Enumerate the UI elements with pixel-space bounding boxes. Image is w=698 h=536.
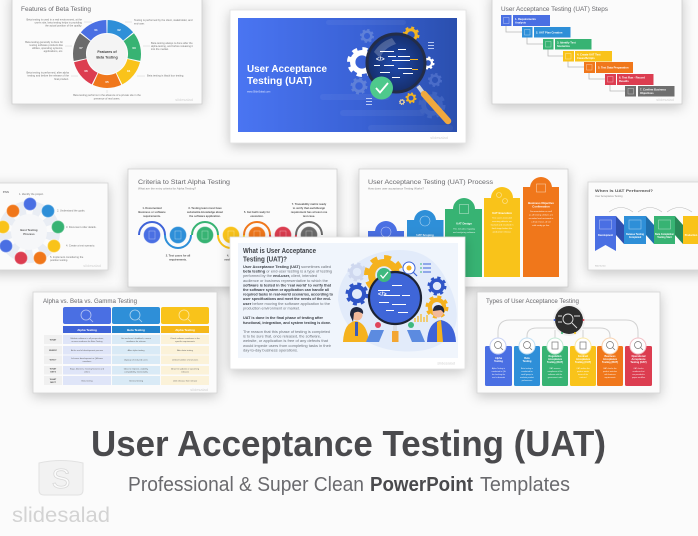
donut chart: 04	[127, 69, 130, 73]
comparison table rows: Validate software in all perspectives,	[70, 337, 104, 340]
slide: what is uat: slidesalad	[437, 360, 455, 366]
type cards: software with the	[548, 373, 562, 376]
comparison table rows: GETS	[50, 372, 57, 374]
donut chart: Features of	[97, 50, 117, 54]
step bars: 1. Requirements	[515, 17, 536, 21]
step bars: Scenarios	[557, 44, 570, 48]
process labels: 3. Document order details.	[66, 225, 97, 229]
step bars: 2. UAT Plan Creation	[536, 30, 563, 34]
type cards: Beta	[524, 357, 530, 360]
type cards: OAT checks	[633, 367, 644, 370]
comparison table header: Alpha Testing	[175, 328, 195, 332]
type cards: Alpha	[495, 357, 503, 360]
criteria labels: evaluation	[224, 258, 238, 262]
feature descriptions: Beta testing is black box testing.	[147, 74, 184, 78]
type cards: Acceptance	[576, 358, 591, 361]
type cards: Contract	[578, 355, 588, 358]
illustration: uat team with magnifier	[338, 250, 457, 352]
process labels	[19, 192, 97, 262]
donut chart	[68, 15, 146, 93]
slide: when is uat performed: Slide Number	[595, 266, 606, 268]
type cards: conducted in QA	[492, 370, 506, 373]
process hub: Best Testing	[20, 228, 38, 232]
type cards: requirements	[604, 376, 616, 379]
type cards: BAT checks the	[603, 367, 617, 370]
body text: the software system or application can handle all	[243, 288, 329, 292]
type cards: proper workflow	[632, 376, 646, 379]
donut chart: 05	[105, 80, 109, 84]
donut chart: Beta Testing	[96, 56, 118, 60]
type cards: Alpha Testing is	[492, 367, 505, 370]
type cards: Testing (OAT)	[630, 361, 647, 364]
main title: User Acceptance Testing (UAT)	[91, 423, 606, 464]
subtitle: Templates	[480, 474, 570, 496]
type cards: with business	[604, 373, 616, 376]
body text: UAT is done in the final phase of testing after	[243, 316, 324, 320]
criteria labels: test case.	[303, 214, 315, 218]
body text: software is tested in the 'real world' to verify that	[243, 283, 332, 287]
type cards: Business	[604, 355, 616, 358]
slide: features of beta testing: slidesalad	[175, 97, 193, 102]
column text: UAT Scoping	[416, 233, 434, 237]
comparison table rows: WHO?	[50, 360, 57, 362]
type cards: Testing	[523, 360, 532, 363]
comparison table rows: WHAT	[50, 368, 57, 370]
comparison table rows: compatibility, functionality	[124, 370, 149, 374]
column text: Business Objective	[528, 201, 554, 205]
comparison table rows: A group of end-end users	[124, 358, 148, 362]
slide: uat steps	[492, 0, 682, 104]
type cards: Testing (RAT)	[547, 361, 563, 364]
comparison table rows: After alpha testing	[128, 349, 145, 352]
column text: and analyzing software	[453, 231, 476, 234]
body text: day-to-day business operations.	[243, 348, 298, 352]
logo: slidesalad: S	[52, 463, 70, 494]
column text: This includes mapping	[453, 228, 476, 230]
slide heading: criteria: Criteria to Start Alpha Testing	[138, 179, 230, 186]
feature descriptions: final product.	[54, 77, 69, 81]
subtitle	[128, 474, 570, 496]
comparison table rows: Get end-user's feedback, ensure	[121, 337, 152, 340]
slide: criteria to start alpha testing: What are the entry criteria for Alpha Testing?	[138, 188, 197, 190]
ribbons: Release Testing	[626, 233, 645, 236]
comparison table header: Beta Testing	[127, 328, 145, 332]
slide heading: steps: User Acceptance Testing (UAT) Steps	[501, 6, 608, 13]
slide: alpha vs beta vs gamma	[33, 292, 217, 393]
column text	[416, 201, 554, 237]
process labels: 1. Identify the project.	[19, 192, 44, 196]
gears	[349, 28, 444, 117]
criteria labels: 5. Get built ready for	[244, 210, 270, 214]
comparison table rows: Ideas for updates or upcoming	[171, 368, 200, 370]
process labels: 2. Understand the goals.	[57, 208, 86, 212]
feature descriptions: presence of real users.	[94, 96, 120, 100]
criteria labels: requirement has at least one	[291, 210, 328, 214]
type cards: contract	[580, 376, 587, 379]
decorative bars	[320, 20, 453, 131]
slide: criteria to start alpha testing	[128, 169, 337, 287]
comparison table rows: WHAT	[50, 378, 57, 381]
hub icon	[553, 304, 585, 336]
feature descriptions: Beta testing generally is done for	[25, 40, 63, 44]
slide heading: comparison: Alpha vs. Beta vs. Gamma Testing	[43, 299, 137, 305]
body text: production environment or market.	[243, 306, 300, 310]
connector lines	[498, 320, 638, 340]
donut chart: 07	[79, 46, 83, 50]
type cards: Regulation	[549, 355, 562, 358]
type cards: readiness that	[633, 370, 645, 373]
type cards: Acceptance	[631, 358, 646, 361]
comparison table rows: After beta testing	[177, 349, 194, 352]
feature descriptions: Beta testing always is done after the	[151, 41, 193, 45]
body text: performed by the end-user, client, intended	[243, 274, 317, 278]
criteria labels: the software application.	[189, 214, 221, 218]
type cards: conducted for	[521, 370, 533, 373]
comparison table rows: General testing	[129, 380, 144, 382]
column text: UAT Design	[456, 222, 472, 226]
slide heading fragment: ess	[3, 189, 9, 194]
column text: UAT Execution	[492, 211, 512, 215]
subtitle: Professional & Super Clean	[128, 474, 364, 496]
feature descriptions: alpha-testing, and before releasing it	[151, 44, 193, 48]
step bars: Objectives	[640, 91, 654, 95]
donut chart: 01	[94, 28, 98, 32]
comparison table rows: ensure readiness for Beta Testing	[72, 340, 103, 343]
column text: Confirmation	[532, 204, 550, 208]
type cards: product matches	[603, 370, 617, 373]
criteria labels: substantia knowledge about	[187, 210, 223, 214]
body text: website, or application is free of any defects that	[243, 339, 328, 343]
comparison table header	[63, 307, 209, 333]
step connectors	[506, 26, 625, 91]
body text	[243, 265, 334, 352]
step bars: 4. Create UAT Test	[577, 52, 601, 56]
comparison table rows: Limit release, then release	[173, 380, 198, 382]
wave timeline	[139, 222, 322, 248]
type cards: terms of the	[578, 373, 588, 376]
donut chart: 06	[84, 69, 88, 73]
slide: what is uat	[230, 237, 465, 369]
subtitle: PowerPoint	[370, 474, 473, 496]
criteria labels: 1. Documented	[142, 206, 162, 210]
stair columns	[368, 177, 559, 277]
feature descriptions: testing and before the release of the	[27, 74, 70, 78]
step bars: 5. Test Data Preparation	[598, 66, 629, 70]
body text: The reason that this phase of testing is completed	[243, 330, 330, 334]
title text: Testing (UAT)	[247, 76, 312, 87]
slide: title slide	[230, 10, 466, 143]
step bars: Results	[619, 79, 629, 83]
type cards: Testing (CAT)	[575, 361, 591, 364]
illustration: uat team with magnifier: </>	[378, 292, 387, 298]
ribbons	[595, 216, 698, 251]
type cards: Acceptance	[548, 358, 563, 361]
feature descriptions: user's site, beta testing helps in providing	[35, 20, 83, 24]
body text: required tasks in real-world scenarios, according to	[243, 293, 334, 297]
criteria labels: 3. Testing team must have	[188, 206, 222, 210]
process labels: position testing.	[50, 258, 68, 262]
slide: types of uat	[477, 292, 660, 393]
body text: User Acceptance Testing (UAT) sometimes called	[243, 265, 331, 269]
ribbons: Completed	[629, 236, 642, 239]
column text: recorded and reviewed in	[529, 217, 554, 220]
comparison table rows: members	[83, 360, 91, 363]
comparison table rows: Limited number of end users	[172, 358, 198, 362]
ribbons: Development	[598, 234, 613, 237]
comparison table rows: releases	[181, 370, 189, 374]
slide: when is uat performed	[588, 182, 698, 270]
feature descriptions: testing software products like	[30, 43, 64, 47]
step bars	[501, 15, 674, 96]
slide: features of beta testing	[12, 0, 202, 104]
criteria labels: to verify that each/design	[293, 206, 326, 210]
process nodes	[0, 198, 64, 264]
column text: Test cases executed	[492, 216, 513, 220]
type cards: evaluate product	[520, 376, 534, 379]
slide heading: what is uat: What is User Acceptance	[243, 246, 316, 255]
slide heading: what is uat: Testing (UAT)?	[243, 254, 287, 264]
feature descriptions: applications, etc.	[44, 49, 63, 53]
comparison table rows: specific requirements	[175, 340, 195, 343]
step bars: 6. Test Run - Record	[619, 76, 645, 80]
arcs	[609, 208, 692, 212]
step bars: Cases/Scripts	[577, 56, 595, 60]
comparison table rows	[44, 335, 209, 385]
process labels: 4. Create a test scenario.	[66, 244, 95, 248]
body text: is to be sure that, once released, the software,	[243, 335, 321, 339]
slide heading: when: When Is UAT Performed?	[595, 189, 654, 193]
feature descriptions: Testing is performed by the client, stakeholder, and	[134, 18, 193, 22]
feature descriptions: into the market.	[151, 47, 169, 51]
type cards: Operational	[632, 355, 646, 358]
pale content panel	[238, 243, 458, 358]
slide: when is uat performed: User Acceptance Testing	[595, 195, 623, 198]
slide: title slide: slidesalad	[430, 135, 448, 140]
column text: a final review, all set	[531, 220, 551, 224]
comparison table rows: In-house development or QA team	[71, 357, 103, 360]
process hub	[5, 208, 53, 256]
magnifying glass: </>	[376, 57, 385, 63]
ribbons: Production	[685, 234, 698, 237]
feature descriptions: end-user.	[134, 22, 145, 26]
step bars: 3. Identify Test	[557, 40, 576, 44]
criteria labels	[138, 202, 328, 262]
donut chart: 03	[132, 46, 136, 50]
type cards: Acceptance	[603, 358, 618, 361]
comparison table rows: Check software readiness in the	[170, 337, 201, 340]
step bars: 7. Confirm Business	[640, 88, 666, 92]
wave circles	[144, 226, 318, 244]
comparison table rows: Bugs, blockers, missing features and	[70, 368, 105, 370]
column text: as all testing artifacts are	[529, 214, 554, 216]
type cards: Testing	[494, 360, 503, 363]
slide: best testing process	[0, 183, 108, 270]
title text	[247, 64, 327, 94]
comparison table rows: At the end of development process	[71, 349, 103, 352]
comparison table rows: others	[84, 370, 90, 374]
criteria labels: requirements.	[169, 258, 187, 262]
criteria labels: requirements.	[143, 214, 161, 218]
blue title panel	[238, 18, 457, 132]
type cards: are provided in	[632, 373, 645, 376]
body text: beta testing or end-user testing is a type of testing	[243, 270, 332, 274]
ribbons: Testing Start	[657, 236, 672, 239]
donut chart: 02	[117, 28, 121, 32]
type cards: product meets	[577, 370, 589, 373]
type cards: compliance of the	[548, 370, 562, 373]
criteria labels: 2. Test cases for all	[166, 254, 191, 258]
criteria labels: 7. Traceability matrix ready	[292, 202, 327, 206]
type cards	[485, 338, 652, 386]
body text: user before moving the software application to the	[243, 302, 330, 306]
feature descriptions	[25, 18, 193, 100]
column text: final stage before the	[492, 227, 513, 230]
comparison table rows: readiness for release	[126, 340, 147, 343]
slide heading: types: Types of User Acceptance Testing	[486, 299, 579, 305]
criteria labels: 4. Test	[227, 254, 235, 258]
logo: slidesalad	[12, 460, 110, 527]
column text: production release.	[493, 230, 512, 234]
feature descriptions: the actual position of the quality.	[45, 24, 82, 28]
type cards: performance	[522, 379, 532, 382]
slide heading: features of beta testing: Features of Beta Testing	[21, 6, 92, 13]
comparison table header: Alpha Testing	[77, 328, 97, 332]
feature descriptions: utilities, operating systems,	[32, 46, 63, 50]
process hub: Process	[23, 232, 35, 236]
logo: slidesalad: slidesalad	[12, 504, 110, 527]
slide heading: what is uat	[243, 246, 316, 264]
title text: User Acceptance	[247, 64, 327, 75]
comparison table rows: Ideas to improve, usability,	[124, 368, 149, 370]
type cards: RAT ensures	[550, 367, 560, 370]
feature descriptions: Beta testing is used in a real environment, at the	[26, 18, 83, 22]
column text: tracked and resolved in	[491, 224, 514, 226]
slide: best testing process: slidesalad	[83, 263, 101, 268]
body text: would impede users from completing tasks in their	[243, 344, 332, 348]
step bars: Analysis	[515, 20, 527, 24]
comparison table rows: WHEN?	[49, 350, 58, 352]
criteria labels: Business or software	[138, 210, 166, 214]
criteria labels: execution.	[250, 214, 264, 218]
feature descriptions: Beta testing is performed, after alpha	[26, 70, 70, 74]
ribbons: Beta Completion	[655, 233, 675, 236]
process labels: 5. Implement considering the	[50, 255, 84, 259]
column text: Documentation as well	[530, 210, 553, 213]
type cards: Testing (BAT)	[602, 361, 618, 364]
body text: functional, integration, and system testing is done.	[243, 321, 331, 325]
slide heading: process: User Acceptance Testing (UAT) Process	[368, 179, 494, 186]
icon: green check badge	[370, 76, 393, 100]
checklists	[366, 42, 434, 105]
slide: uat steps: slidesalad	[656, 97, 674, 102]
comparison table rows: Beta testing	[82, 380, 93, 382]
type cards: CAT verifies the	[576, 367, 590, 370]
comparison table rows: WHAT	[50, 338, 57, 342]
magnifying glass	[367, 34, 448, 121]
type cards: government rules	[548, 376, 562, 379]
column text: ensuring defects are	[492, 220, 513, 223]
slide: alpha vs beta vs gamma: slidesalad	[190, 387, 208, 392]
comparison table rows: NEXT	[50, 382, 57, 384]
type cards: user's demands	[492, 376, 505, 379]
body text: user specifications and meet the needs of the end-	[243, 297, 332, 301]
body text: audience or business representative to which the	[243, 279, 328, 283]
feature descriptions: Beta testing performs in the absence of a private site in the	[73, 93, 141, 97]
slide: uat process	[359, 169, 568, 287]
title text: www.SlideSalad.com	[247, 90, 270, 94]
type cards: small group to	[521, 373, 533, 376]
type cards: Beta testing is	[521, 367, 533, 370]
slide: uat process: How does user acceptance Testing Works?	[368, 188, 425, 190]
column text: with ready go live.	[532, 224, 550, 227]
type cards: for checking the	[492, 373, 505, 376]
